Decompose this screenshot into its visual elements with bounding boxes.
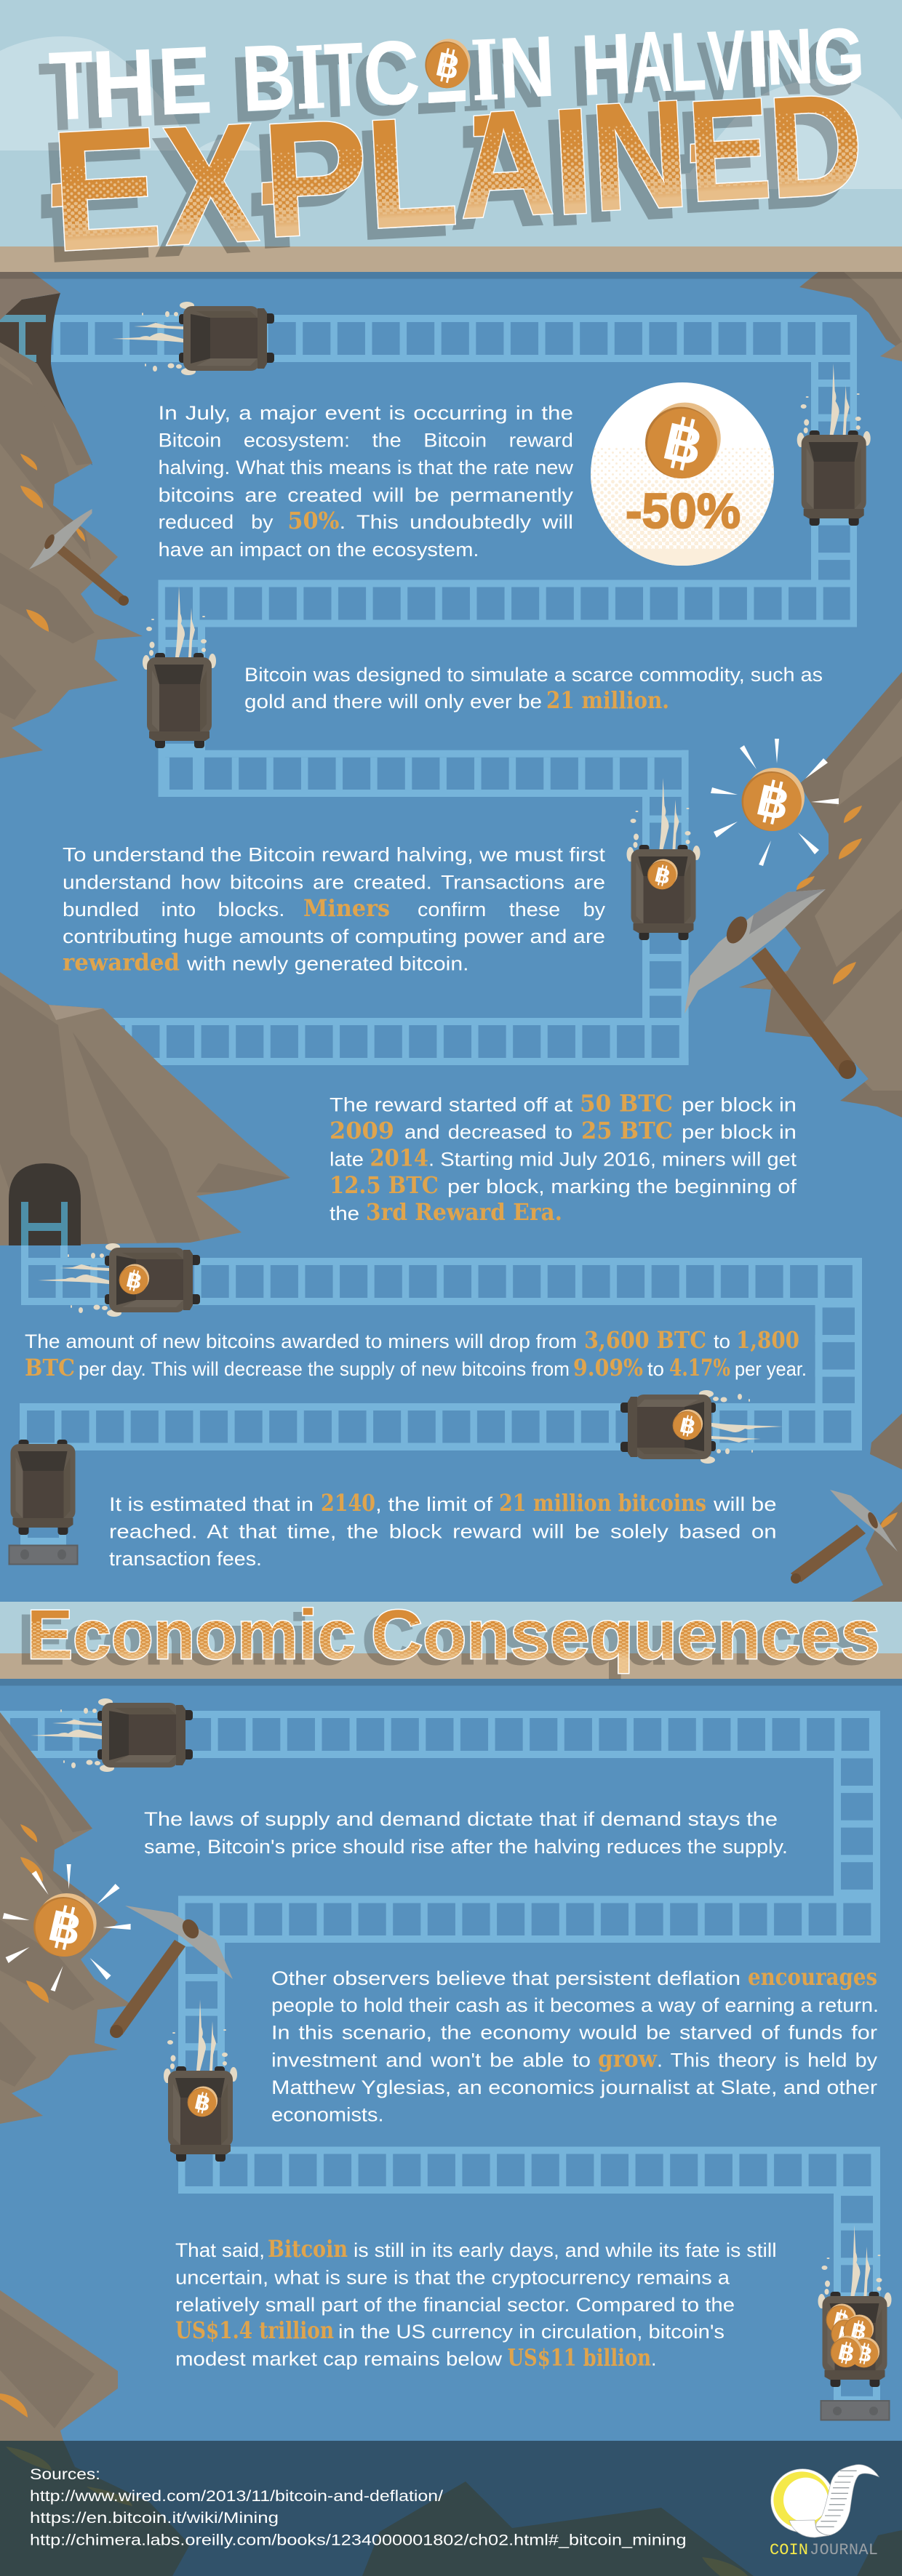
text block: deflation — [271, 1963, 879, 2126]
text block: supply drop — [25, 1326, 807, 1381]
text block: early days: . — [651, 2348, 657, 2370]
header sky band — [0, 0, 902, 272]
text block: limit reached in 2140: It is estimated that in — [109, 1493, 314, 1515]
text block: reward history — [330, 1090, 797, 1226]
text block: intro — [159, 402, 574, 561]
text block: intro: 50% — [287, 507, 339, 534]
text block: sources: https://en.bitcoin.it/wiki/Mining — [30, 2510, 279, 2527]
text block: reward history: 3rd Reward Era. — [366, 1198, 562, 1226]
text block: early days: US$11 billion — [508, 2343, 651, 2371]
title line one: G — [812, 11, 866, 103]
title line one: I — [468, 21, 501, 120]
title line one — [47, 11, 866, 141]
text block: limit reached in 2140: 21 million bitcoins — [499, 1489, 706, 1517]
title line two: X — [158, 87, 262, 281]
text block: supply drop: per year. — [735, 1358, 807, 1380]
icon: pickaxe second section — [110, 1906, 233, 2038]
mountain: top left overhang — [0, 272, 60, 320]
section band: economic consequences — [0, 1602, 902, 1679]
text block: intro: . This undoubtedly will — [340, 511, 573, 533]
text block: supply drop: to — [647, 1358, 664, 1380]
title line one: H — [579, 15, 634, 114]
text block: intro: In July, a major event is occurring in the — [159, 402, 573, 424]
title line one: C — [361, 22, 422, 125]
heading: economic consequences: Consequences — [371, 1596, 880, 1674]
text block: reward history: per block in — [682, 1121, 797, 1143]
title line one: L — [669, 15, 708, 109]
text block: how bitcoins are created: with newly generated bitcoin. — [186, 953, 468, 975]
title line two: D — [765, 63, 867, 228]
text block: how bitcoins are created: bundled into blocks. — [63, 899, 285, 920]
title line two: E — [684, 67, 775, 232]
text block: early days: US$1.4 trillion — [175, 2316, 334, 2344]
mountain orange ore spots: second section — [20, 1824, 49, 2003]
icon: coin burst left — [3, 1864, 131, 1991]
text block: early days: relatively small part of the financial sector. Compared to the — [175, 2294, 735, 2316]
title line one: I — [292, 27, 328, 130]
text block: supply drop: 3,600 BTC — [584, 1326, 706, 1354]
text block: reward history: per block in — [682, 1094, 797, 1116]
text block: scarce commodity — [244, 664, 823, 714]
mountain: top right overhang — [799, 272, 902, 361]
text block: limit reached in 2140: transaction fees. — [109, 1548, 262, 1570]
mine cart: moving left with coin — [620, 1390, 783, 1464]
title line two: A — [453, 77, 557, 251]
badge: minus 50 percent — [589, 382, 778, 567]
text block: supply drop: per day. This will decrease the supply of new bitcoins from — [79, 1358, 570, 1380]
text block: scarce commodity: gold and there will only ever be — [244, 691, 542, 713]
text block: sources: Sources: — [30, 2466, 100, 2483]
logo: coinjournal: COIN — [770, 2541, 808, 2559]
mine cart: economic section moving down with coin — [164, 1999, 237, 2162]
text block: how bitcoins are created — [63, 844, 606, 976]
title line two: I — [548, 76, 597, 247]
mine cart: right track moving down — [797, 364, 871, 526]
mountain: left rock second section — [0, 1712, 129, 2124]
text block: limit reached in 2140: 2140 — [321, 1489, 375, 1517]
text block: sources — [30, 2466, 687, 2549]
title: the bitcoin halving explained — [47, 11, 867, 287]
text block: supply drop: to — [714, 1331, 730, 1352]
title line two: N — [586, 67, 693, 244]
tunnel entrance with track — [9, 1163, 81, 1245]
mountain: left large rock — [0, 334, 145, 771]
track stopper: first section — [9, 1546, 77, 1565]
text block: sources: http://chimera.labs.oreilly.com/books/1234000001802/ch02.html#_bitcoin_mining — [30, 2532, 687, 2549]
heading: economic consequences: Economic — [27, 1596, 356, 1674]
mine cart: economic section moving right — [31, 1698, 193, 1772]
text block: limit reached in 2140: will be — [713, 1493, 777, 1515]
text block: scarce commodity: Bitcoin was designed to simulate a scarce commodity, such as — [244, 664, 823, 686]
text block: early days: modest market cap remains below — [175, 2348, 503, 2370]
text block: deflation: grow — [598, 2045, 658, 2073]
text block: reward history: 50 BTC — [580, 1090, 673, 1118]
mine cart: parked at stopper — [10, 1440, 76, 1535]
mine track network: first section — [0, 315, 862, 1545]
mountain: right middle rock — [727, 669, 902, 1120]
text block: reward history: 12.5 BTC — [330, 1171, 439, 1199]
text block: deflation: . This theory is held by — [657, 2050, 878, 2071]
mine track network: second section — [0, 1711, 880, 2401]
mine cart: with coin — [627, 778, 700, 940]
title line one: T — [47, 31, 96, 141]
text block: reward history: per block, marking the beginning of — [447, 1176, 797, 1197]
text block: limit reached in 2140 — [109, 1489, 777, 1570]
logo: coinjournal — [770, 2465, 879, 2559]
title line one: A — [629, 13, 674, 111]
mountain orange ore spots: left rock — [20, 454, 85, 632]
text block: intro: Bitcoin ecosystem: the Bitcoin reward — [159, 429, 573, 451]
text block: intro: reduced by — [159, 511, 274, 533]
text block: supply drop: 9.09% — [573, 1354, 643, 1381]
text block: limit reached in 2140: reached. At that time, the block reward will be solely based on — [109, 1521, 777, 1543]
logo: coinjournal: JOURNAL — [810, 2541, 878, 2559]
track stopper: end of line — [821, 2401, 889, 2420]
title line one: N — [764, 12, 815, 103]
text block: intro: have an impact on the ecosystem. — [159, 539, 479, 561]
title line one: I — [745, 13, 772, 105]
text block: sources: http://www.wired.com/2013/11/bitcoin-and-deflation/ — [30, 2488, 443, 2505]
title line one: N — [496, 18, 557, 117]
text block: supply and demand: same, Bitcoin's price should rise after the halving reduces the supply. — [144, 1836, 788, 1858]
mine cart: full of coins — [818, 2225, 892, 2387]
title line one: V — [706, 12, 748, 110]
text block: deflation: In this scenario, the economy would be starved of funds for — [271, 2021, 877, 2043]
text block: supply drop: BTC — [25, 1354, 75, 1381]
title line two: E — [47, 90, 166, 287]
text block: deflation: Matthew Yglesias, an economics journalist at Slate, and other — [271, 2077, 877, 2098]
text block: early days: Bitcoin — [268, 2235, 348, 2263]
mine cart: moving right with coin — [38, 1243, 200, 1317]
text block: reward history: 2009 — [330, 1117, 394, 1144]
title line one: E — [156, 26, 214, 135]
mountain: right lower rocks — [851, 1413, 902, 1602]
icon: bitcoin replacing the O — [425, 39, 471, 88]
text block: early days — [175, 2235, 777, 2371]
title line one: H — [89, 28, 159, 138]
mountain: left tunnel rock — [0, 972, 290, 1245]
text block: reward history: 25 BTC — [581, 1117, 673, 1144]
dark bands under headers — [0, 272, 902, 1685]
mountain: bottom left rock — [0, 2290, 118, 2441]
text block: reward history: late — [330, 1149, 364, 1171]
text block: deflation: encourages — [748, 1963, 877, 1991]
text block: how bitcoins are created: understand how bitcoins are created. Transactions are — [63, 871, 605, 893]
heading: economic consequences — [27, 1596, 880, 1674]
text block: early days: That said, — [175, 2239, 265, 2261]
mountain orange ore spots: right rock — [797, 806, 862, 984]
text block: scarce commodity: 21 million. — [546, 686, 669, 714]
text block: early days: is still in its early days, and while its fate is still — [354, 2239, 777, 2261]
title line one: T — [322, 24, 366, 127]
text block: supply and demand: The laws of supply and demand dictate that if demand stays the — [144, 1808, 778, 1830]
text block: reward history: the — [330, 1203, 359, 1224]
badge: minus 50 percent: -50% — [626, 483, 741, 539]
text block: early days: uncertain, what is sure is that the cryptocurrency remains a — [175, 2267, 730, 2289]
cave: top left tunnel — [0, 293, 92, 465]
text block: reward history: and decreased to — [404, 1121, 572, 1143]
text block: intro: halving. What this means is that the rate new — [159, 457, 574, 478]
text block: deflation: Other observers believe that persistent deflation — [271, 1967, 741, 1989]
icon: pickaxe top left — [29, 509, 129, 606]
title line one: B — [239, 25, 298, 132]
title line two: P — [258, 85, 373, 272]
text block: intro: bitcoins are created will be permanently — [159, 484, 574, 506]
text block: limit reached in 2140: , the limit of — [375, 1493, 493, 1515]
text block: how bitcoins are created: contributing huge amounts of computing power and are — [63, 926, 605, 947]
text block: deflation: investment and won't be able to — [271, 2050, 591, 2071]
mine cart: second track moving down — [143, 586, 216, 748]
mine cart: top track moving right — [112, 302, 274, 375]
text block: how bitcoins are created: rewarded — [63, 949, 180, 976]
title line two — [47, 63, 867, 287]
text block: supply drop: The amount of new bitcoins awarded to miners will drop from — [25, 1331, 577, 1352]
text block: reward history: 2014 — [370, 1144, 428, 1172]
text block: supply drop: 1,800 — [736, 1326, 799, 1354]
text block: deflation: economists. — [271, 2104, 384, 2126]
footer panel — [0, 2441, 902, 2576]
text block: how bitcoins are created: Miners — [303, 894, 390, 922]
text block: deflation: people to hold their cash as it becomes a way of earning a return. — [271, 1994, 879, 2016]
title line two: L — [362, 84, 461, 262]
text block: reward history: . Starting mid July 2016, miners will get — [428, 1149, 797, 1171]
text block: supply and demand — [144, 1808, 788, 1858]
text block: early days: in the US currency in circulation, bitcoin's — [338, 2321, 725, 2343]
icon: small pickaxe lower right — [791, 1490, 898, 1584]
icon: large pickaxe right — [685, 889, 856, 1079]
text block: how bitcoins are created: confirm these by — [418, 899, 606, 920]
text block: reward history: The reward started off at — [330, 1094, 573, 1116]
icon: coin burst right — [711, 739, 839, 866]
text block: how bitcoins are created: To understand the Bitcoin reward halving, we must first — [63, 844, 606, 866]
text block: supply drop: 4.17% — [669, 1354, 730, 1381]
